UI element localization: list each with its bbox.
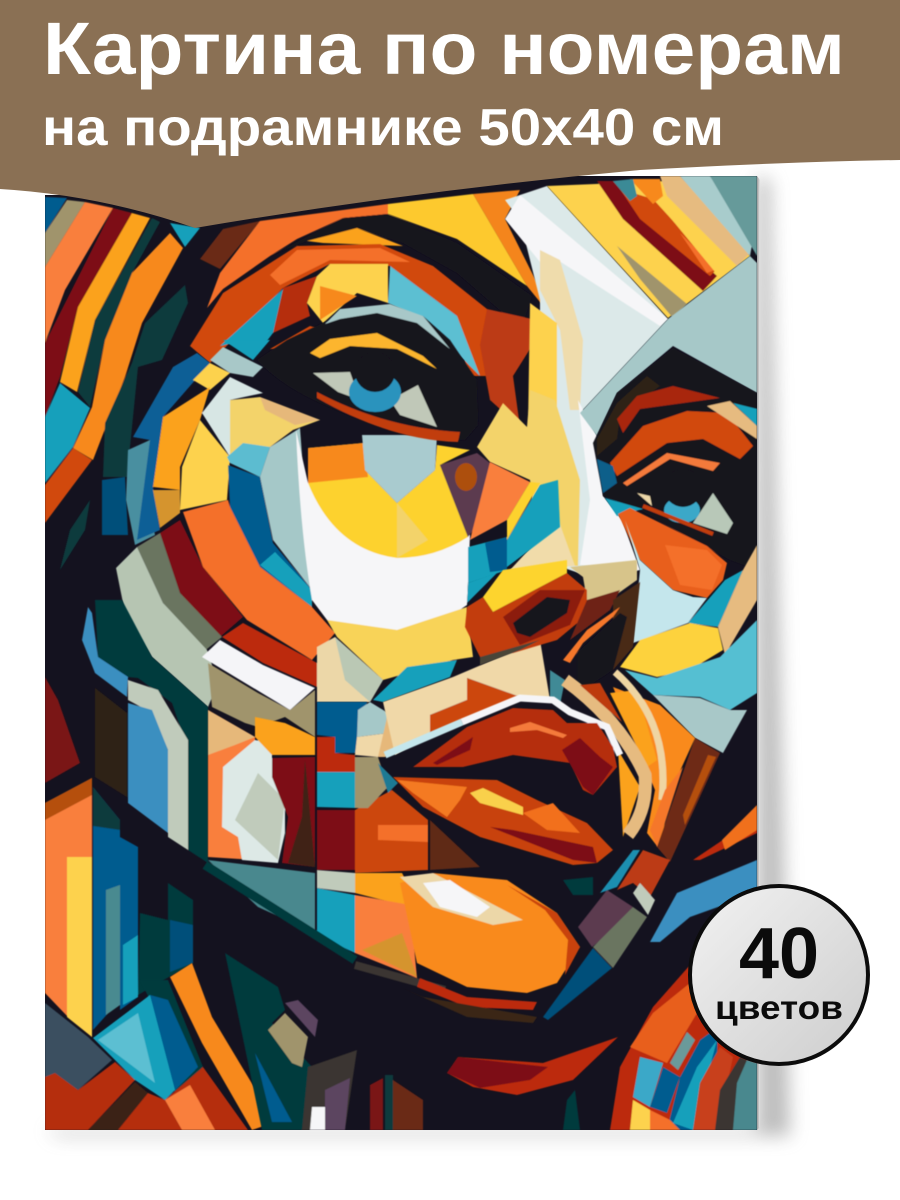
badge: 40 colours (690, 886, 868, 1064)
bottom right arcs (610, 965, 757, 1130)
yellow disc (308, 443, 470, 558)
painting canvas (45, 170, 757, 1135)
badge number: 40 (739, 914, 819, 994)
top-left hair stripes (45, 197, 200, 570)
right eye area (593, 348, 757, 598)
lips (385, 698, 620, 865)
cheek concentric circles (116, 340, 560, 737)
lower left stripes (45, 778, 193, 1037)
white disc (296, 430, 470, 632)
header ribbon (0, 0, 900, 228)
area above lips (383, 640, 550, 755)
nose (465, 560, 640, 705)
right face pale panel (580, 256, 757, 436)
right cheek bands (620, 520, 757, 753)
bottom left corner shapes (45, 963, 275, 1130)
badge label: цветов (715, 989, 843, 1026)
chin (205, 860, 580, 1023)
left eye (257, 304, 478, 442)
canvas right side edge (757, 176, 760, 1130)
lower left arch and arc (45, 600, 208, 863)
title: Картина по номерам (43, 7, 845, 90)
top white face area (477, 186, 668, 580)
lower dark neck details (225, 953, 618, 1130)
subtitle: на подрамнике 50х40 см (42, 99, 724, 157)
forehead shapes (190, 190, 557, 427)
top-right hair stripes (547, 176, 757, 318)
canvas shadow (45, 176, 790, 1136)
center patches under cheek (208, 702, 480, 873)
right jaw (543, 672, 757, 1020)
